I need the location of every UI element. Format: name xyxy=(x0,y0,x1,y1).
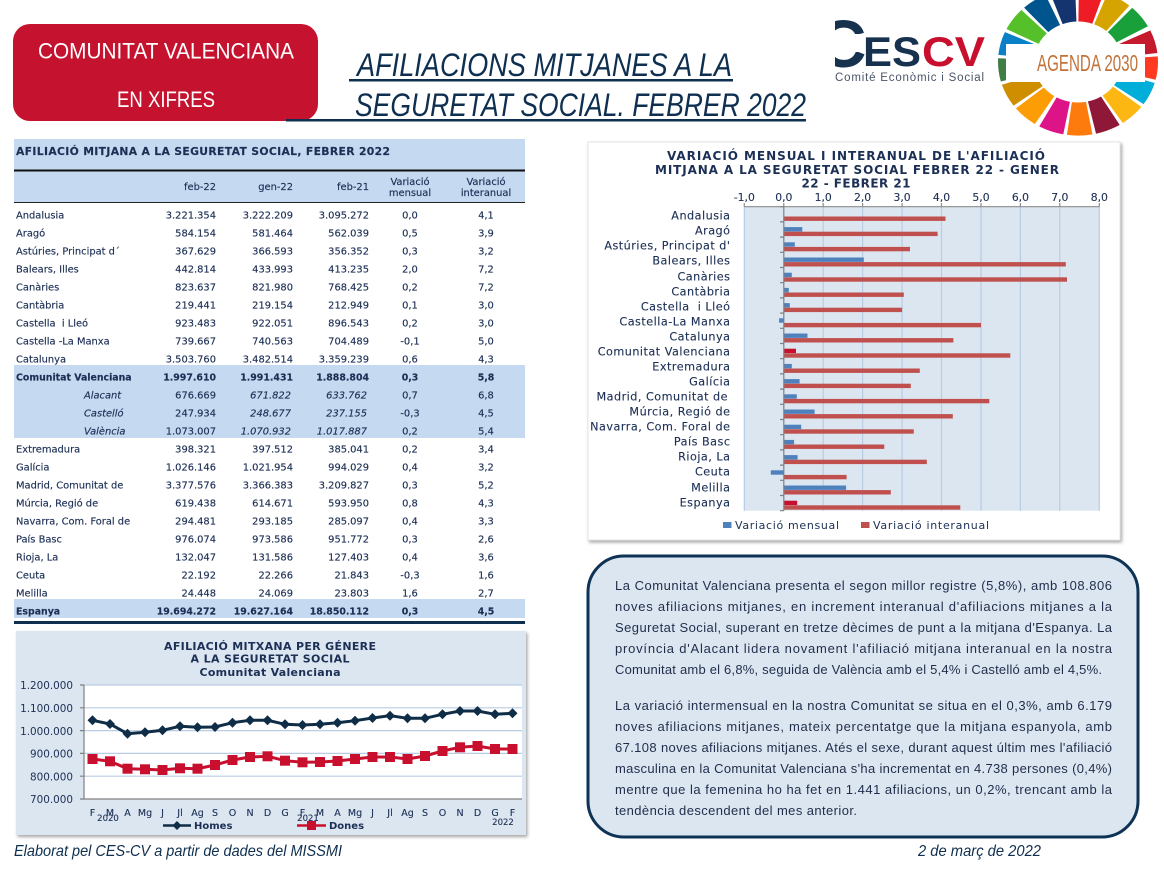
row: Andalusia: 3.095.272 xyxy=(319,210,369,222)
source note: Elaborat pel CES-CV a partir de dades del MISSMI xyxy=(14,843,342,860)
paragraph one: noves afiliacions mitjanes, en increment interanual d'afiliacions mitjanes a la xyxy=(615,599,1113,614)
series: Homes xyxy=(92,711,512,734)
row: Alacant: 633.762 xyxy=(326,390,367,402)
row: Astúries xyxy=(16,246,494,258)
row: Andalusia: Andalusia xyxy=(16,210,64,222)
row: Navarra: 0,4 xyxy=(402,516,418,528)
row: Galícia: 1.026.146 xyxy=(166,462,216,474)
row: Navarra: 294.481 xyxy=(175,516,216,528)
category labels: Castella-La Manxa xyxy=(619,316,730,328)
category labels: Catalunya xyxy=(669,330,730,344)
x axis month labels: S xyxy=(212,808,218,819)
row: Alacant: 0,7 xyxy=(402,390,418,402)
row: Cantàbria: 212.949 xyxy=(328,300,369,312)
yearly variation bars xyxy=(784,216,1067,510)
row: Extremadura: 397.512 xyxy=(252,444,293,456)
row: Madrid: 3.377.576 xyxy=(166,480,216,492)
row: Galícia: 1.021.954 xyxy=(243,462,293,474)
top axis labels: 2,0 xyxy=(854,191,871,204)
row: Ceuta: 22.266 xyxy=(258,570,293,582)
row: Castelló: 4,5 xyxy=(478,408,494,420)
x axis month labels: M xyxy=(106,808,114,819)
category labels: Espanya xyxy=(680,496,730,510)
highlight band: Espanya xyxy=(14,599,525,618)
x axis month labels: D xyxy=(474,808,481,819)
row: Extremadura: 398.321 xyxy=(175,444,216,456)
row: Andalusia: 0,0 xyxy=(402,210,418,222)
x axis month labels: Jl xyxy=(386,808,393,819)
row: Canàries: Canàries xyxy=(16,282,59,294)
line chart title: AFILIACIÓ MITXANA PER GÉNERE xyxy=(164,640,376,653)
commentary panel xyxy=(588,556,1138,837)
top axis labels: -1,0 xyxy=(734,191,755,204)
row: Múrcia: 593.950 xyxy=(328,498,369,510)
row: País Basc: País Basc xyxy=(16,534,62,546)
monthly variation bars xyxy=(771,227,864,505)
category labels: Canàries xyxy=(677,270,730,284)
bar chart legend: Variació interanual xyxy=(873,519,989,532)
row: València: València xyxy=(84,426,125,438)
row: Navarra: Navarra, Com. Foral de xyxy=(16,516,130,528)
logo: Agenda 2030 wheel xyxy=(990,0,1164,143)
paragraph two: La variació intermensual en la nostra Comunitat se situa en el 0,3%, amb 6.179 xyxy=(615,698,1112,713)
series: Dones xyxy=(92,746,512,770)
paragraph two: 67.108 noves afiliacions mitjanes. Atés el sexe, durant aquest últim mes l'afiliació xyxy=(615,740,1112,755)
row: Melilla: 2,7 xyxy=(478,588,494,600)
red header badge: COMUNITAT VALENCIANA xyxy=(38,38,294,64)
row: Canàries: 821.980 xyxy=(252,282,293,294)
row: Ceuta: 22.192 xyxy=(181,570,216,582)
row: Canàries xyxy=(16,282,494,294)
row: Comunitat Valenciana: 5,8 xyxy=(478,372,494,384)
row: Canàries: 823.637 xyxy=(175,282,216,294)
category labels: Castella i Lleó xyxy=(641,300,730,314)
row: Melilla: 23.803 xyxy=(334,588,369,600)
top axis labels: 6,0 xyxy=(1012,191,1029,204)
row: Extremadura: 0,2 xyxy=(402,444,418,456)
x axis month labels: M xyxy=(316,808,324,819)
row: Ceuta: -0,3 xyxy=(400,570,420,582)
row: Múrcia: 4,3 xyxy=(478,498,494,510)
row: Comunitat Valenciana: 1.997.610 xyxy=(163,372,216,384)
row: Melilla xyxy=(16,588,494,600)
row: Rioja: 131.586 xyxy=(252,552,293,564)
x axis month labels: F xyxy=(300,808,305,819)
row: Espanya: 19.627.164 xyxy=(234,606,293,618)
x axis month labels: J xyxy=(160,808,164,819)
paragraph two: mentre que la femenina ho ha fet en 1.441 afiliacions, un 0,2%, trencant amb la xyxy=(615,782,1113,797)
row: Balears xyxy=(16,264,494,276)
table column headers: feb-21 xyxy=(337,182,369,193)
row: Múrcia: Múrcia, Regió de xyxy=(16,498,98,510)
row: Castella-La Manxa xyxy=(16,336,494,348)
row: Canàries: 7,2 xyxy=(478,282,494,294)
row: València: 5,4 xyxy=(478,426,494,438)
bar chart title: VARIACIÓ MENSUAL I INTERANUAL DE L'AFILIACIÓ xyxy=(667,148,1045,163)
row: Aragó: 0,5 xyxy=(402,228,418,240)
row: Catalunya: 3.482.514 xyxy=(243,354,293,366)
x axis month labels: Ag xyxy=(191,808,204,819)
row: Múrcia: 619.438 xyxy=(175,498,216,510)
row: Madrid: 0,3 xyxy=(402,480,418,492)
x axis month labels xyxy=(90,808,515,828)
top axis labels: 4,0 xyxy=(933,191,950,204)
table column headers: feb-22 xyxy=(184,182,216,193)
row: Alacant xyxy=(83,390,494,402)
main title xyxy=(286,47,806,123)
row: Castelló: -0,3 xyxy=(400,408,420,420)
row: Balears: 442.814 xyxy=(175,264,216,276)
paragraph one: Comunitat amb el 6,8%, seguida de València amb el 5,4% i Castelló amb el 4,5%. xyxy=(615,662,1102,677)
line chart: affiliation by gender xyxy=(16,631,526,835)
x axis month labels: 2020 xyxy=(97,814,119,824)
line chart title: Comunitat Valenciana xyxy=(200,666,340,679)
category labels: Extremadura xyxy=(652,360,730,374)
row: Cantàbria: 0,1 xyxy=(402,300,418,312)
row: Astúries: 367.629 xyxy=(175,246,216,258)
category labels: Navarra, Com. Foral de xyxy=(590,420,730,434)
row: Rioja: Rioja, La xyxy=(16,552,58,564)
row: Galícia: 0,4 xyxy=(402,462,418,474)
row: Madrid: 3.209.827 xyxy=(319,480,369,492)
x axis month labels: 2022 xyxy=(492,818,514,828)
logo: CES-CV: CV xyxy=(922,28,985,75)
data table xyxy=(14,139,525,624)
paragraph one xyxy=(615,578,1113,677)
row: Catalunya xyxy=(16,354,494,366)
row: Aragó: Aragó xyxy=(16,228,45,240)
row: Aragó: 581.464 xyxy=(252,228,293,240)
row: València: 0,2 xyxy=(402,426,418,438)
row: Espanya xyxy=(16,606,494,618)
row: Catalunya: 3.359.239 xyxy=(319,354,369,366)
row: Castelló: 247.934 xyxy=(175,408,216,420)
row: Espanya: Espanya xyxy=(16,606,60,618)
x axis month labels: Mg xyxy=(138,808,152,819)
x axis month labels: G xyxy=(491,808,499,819)
row: Rioja: 0,4 xyxy=(402,552,418,564)
row: Comunitat Valenciana: Comunitat Valenciana xyxy=(16,372,132,384)
paragraph two: noves afiliacions mitjanes, mateix percentatge que la mitjana espanyola, amb xyxy=(615,719,1112,734)
x axis month labels: A xyxy=(334,808,341,819)
y axis labels: 1.200.000 xyxy=(20,680,73,692)
row: Navarra: 293.185 xyxy=(252,516,293,528)
row: Espanya: 4,5 xyxy=(478,606,494,618)
row: Alacant: 671.822 xyxy=(250,390,291,402)
category labels: Melilla xyxy=(691,482,730,494)
row: València: 1.073.007 xyxy=(166,426,216,438)
y axis labels: 1.100.000 xyxy=(20,703,73,715)
y axis labels xyxy=(20,680,73,806)
row: Catalunya: 4,3 xyxy=(478,354,494,366)
logo: CES-CV xyxy=(835,20,985,81)
bar chart legend xyxy=(723,519,989,532)
row: Castella i Lleó: 896.543 xyxy=(328,318,369,330)
paragraph one: La Comunitat Valenciana presenta el segon millor registre (5,8%), amb 108.806 xyxy=(615,578,1112,593)
row: Castelló: Castelló xyxy=(84,408,124,420)
row: Rioja: 132.047 xyxy=(175,552,216,564)
line chart legend xyxy=(163,821,364,832)
row: Astúries: 0,3 xyxy=(402,246,418,258)
row: Extremadura: Extremadura xyxy=(16,444,80,456)
row: Canàries: 768.425 xyxy=(328,282,369,294)
row: Canàries: 0,2 xyxy=(402,282,418,294)
row: País Basc: 976.074 xyxy=(175,534,216,546)
x axis month labels: 2021 xyxy=(297,814,319,824)
row: Castella i Lleó: Castella i Lleó xyxy=(16,318,88,330)
line chart legend: Dones xyxy=(329,821,364,832)
publication date: 2 de març de 2022 xyxy=(917,843,1041,860)
row: Castella-La Manxa: 740.563 xyxy=(252,336,293,348)
row: Cantàbria: 3,0 xyxy=(478,300,494,312)
row: València: 1.070.932 xyxy=(241,426,291,438)
y axis labels: 700.000 xyxy=(30,794,73,806)
row: Andalusia xyxy=(16,210,494,222)
x axis month labels: O xyxy=(439,808,446,819)
category labels xyxy=(590,210,730,510)
row: Comunitat Valenciana xyxy=(16,372,494,384)
bar chart title: MITJANA A LA SEGURETAT SOCIAL FEBRER 22 - GENER xyxy=(655,163,1059,177)
top axis labels: 7,0 xyxy=(1051,191,1069,204)
row: País Basc: 951.772 xyxy=(328,534,369,546)
table column headers xyxy=(14,170,525,203)
row: Rioja: 3,6 xyxy=(478,552,494,564)
category labels: Astúries, Principat d' xyxy=(604,240,730,252)
x axis month labels: S xyxy=(422,808,428,819)
row: Aragó: 584.154 xyxy=(175,228,216,240)
x axis month labels: N xyxy=(246,808,254,819)
table column headers: gen-22 xyxy=(258,182,293,193)
row: Alacant: 676.669 xyxy=(175,390,216,402)
row: País Basc xyxy=(16,534,494,546)
highlight band: Comunitat Valenciana xyxy=(14,365,525,438)
row: Galícia: 3,2 xyxy=(478,462,494,474)
main title: SEGURETAT SOCIAL. FEBRER 2022 xyxy=(355,87,806,123)
category labels: Rioja, La xyxy=(678,450,730,464)
category labels: Comunitat Valenciana xyxy=(598,346,730,358)
paragraph one: província d'Alacant lidera novament l'afiliació mitjana interanual en la nostra xyxy=(615,641,1113,656)
x axis month labels: F xyxy=(90,808,95,819)
row: Ceuta: 21.843 xyxy=(334,570,369,582)
row: Castelló: 237.155 xyxy=(326,408,367,420)
row: Castella-La Manxa: Castella -La Manxa xyxy=(16,336,110,348)
x axis month labels: Ag xyxy=(401,808,414,819)
row: Castelló: 248.677 xyxy=(250,408,292,420)
row: Aragó: 562.039 xyxy=(328,228,369,240)
row: Madrid xyxy=(16,480,494,492)
row: Extremadura xyxy=(16,444,494,456)
row: Andalusia: 3.221.354 xyxy=(166,210,216,222)
line chart title xyxy=(164,640,376,679)
red header badge: EN XIFRES xyxy=(117,87,215,112)
row: Espanya: 18.850.112 xyxy=(310,606,369,618)
row: Melilla: 1,6 xyxy=(402,588,418,600)
row: Aragó xyxy=(16,228,494,240)
logo: CES-CV: Comité Econòmic i Social xyxy=(835,72,984,84)
row: Galícia xyxy=(16,462,494,474)
x axis month labels: A xyxy=(124,808,131,819)
row: Astúries: Astúries, Principat d´ xyxy=(16,246,120,258)
category labels: País Basc xyxy=(674,436,730,448)
category labels: Galícia xyxy=(689,376,730,388)
row: Galícia: Galícia xyxy=(16,462,49,474)
row: Extremadura: 3,4 xyxy=(478,444,494,456)
row: Castelló xyxy=(84,408,494,420)
x axis month labels: D xyxy=(264,808,271,819)
row: Castella i Lleó: 3,0 xyxy=(478,318,494,330)
row: Madrid: Madrid, Comunitat de xyxy=(16,480,123,492)
row: Navarra: 285.097 xyxy=(328,516,369,528)
x axis month labels: G xyxy=(281,808,289,819)
table column headers: Variació xyxy=(466,176,506,188)
x axis month labels: Mg xyxy=(348,808,362,819)
row: Castella i Lleó: 0,2 xyxy=(402,318,418,330)
bar chart title: 22 - FEBRER 21 xyxy=(802,176,910,190)
row: Rioja: 127.403 xyxy=(328,552,369,564)
row: Castella-La Manxa: 704.489 xyxy=(328,336,369,348)
row: Navarra xyxy=(16,516,494,528)
line chart title: A LA SEGURETAT SOCIAL xyxy=(190,652,350,666)
row: Melilla: 24.448 xyxy=(181,588,216,600)
category labels: Madrid, Comunitat de xyxy=(596,390,728,404)
y axis labels: 800.000 xyxy=(30,772,73,784)
row: Ceuta: 1,6 xyxy=(478,570,494,582)
table column headers: interanual xyxy=(461,188,511,199)
row: Ceuta xyxy=(16,570,494,582)
y axis labels: 900.000 xyxy=(30,748,73,760)
row: Navarra: 3,3 xyxy=(478,516,494,528)
row: Cantàbria: 219.154 xyxy=(252,300,293,312)
row: Cantàbria: 219.441 xyxy=(175,300,216,312)
bar chart legend: Variació mensual xyxy=(735,519,839,532)
row: València xyxy=(84,426,494,438)
row: País Basc: 973.586 xyxy=(252,534,293,546)
row: Castella i Lleó: 922.051 xyxy=(252,318,293,330)
paragraph two: masculina en la Comunitat Valenciana s'ha incrementat en 4.738 persones (0,4%) xyxy=(615,761,1112,776)
top axis labels: 3,0 xyxy=(894,191,911,204)
row: Alacant: Alacant xyxy=(83,390,122,402)
y axis labels: 1.000.000 xyxy=(20,726,73,738)
row: Múrcia: 614.671 xyxy=(252,498,293,510)
row: Catalunya: 0,6 xyxy=(402,354,418,366)
row: Ceuta: Ceuta xyxy=(16,570,45,582)
row: Múrcia: 0,8 xyxy=(402,498,418,510)
row: Galícia: 994.029 xyxy=(328,462,369,474)
category labels: Cantàbria xyxy=(671,286,730,298)
row: Astúries: 356.352 xyxy=(328,246,369,258)
row: Astúries: 366.593 xyxy=(252,246,293,258)
table title band xyxy=(14,139,525,170)
row: Espanya: 0,3 xyxy=(402,606,418,618)
row: Melilla: 24.069 xyxy=(258,588,293,600)
row: Astúries: 3,2 xyxy=(478,246,494,258)
row: València: 1.017.887 xyxy=(317,426,368,438)
category labels: Múrcia, Regió de xyxy=(629,406,730,418)
logo: CES-CV: ES xyxy=(863,28,921,75)
paragraph one: Seguretat Social, superant en tretze dècimes de punt a la mitjana d'Espanya. La xyxy=(615,620,1113,635)
bar chart: monthly and yearly variation xyxy=(588,142,1120,540)
row: Comunitat Valenciana: 0,3 xyxy=(402,372,418,384)
top axis labels xyxy=(734,191,1108,204)
x axis month labels: O xyxy=(229,808,236,819)
x axis month labels: N xyxy=(456,808,464,819)
x axis month labels: Jl xyxy=(176,808,183,819)
x axis month labels: F xyxy=(510,808,515,819)
row: Madrid: 5,2 xyxy=(478,480,494,492)
row: Balears: 413.235 xyxy=(328,264,369,276)
row: Andalusia: 4,1 xyxy=(478,210,494,222)
row: Alacant: 6,8 xyxy=(478,390,494,402)
red header badge xyxy=(13,24,318,121)
category labels: Balears, Illes xyxy=(652,254,730,268)
row: Balears: Balears, Illes xyxy=(16,264,79,276)
row: Comunitat Valenciana: 1.888.804 xyxy=(316,372,369,384)
line chart legend: Homes xyxy=(194,821,232,832)
row: Espanya: 19.694.272 xyxy=(157,606,216,618)
row: Andalusia: 3.222.209 xyxy=(243,210,293,222)
category labels: Aragó xyxy=(695,224,730,238)
row: País Basc: 2,6 xyxy=(478,534,494,546)
row: Castella i Lleó: 923.483 xyxy=(175,318,216,330)
x axis month labels: J xyxy=(370,808,374,819)
main title: AFILIACIONS MITJANES A LA xyxy=(355,47,732,83)
table bottom rule xyxy=(14,621,525,624)
row: Comunitat Valenciana: 1.991.431 xyxy=(240,372,293,384)
row: Cantàbria xyxy=(16,300,494,312)
paragraph two xyxy=(615,698,1113,818)
paragraph two: tendència descendent del mes anterior. xyxy=(615,803,857,818)
row: Balears: 7,2 xyxy=(478,264,494,276)
row: Extremadura: 385.041 xyxy=(328,444,369,456)
row: Balears: 2,0 xyxy=(402,264,418,276)
row: Catalunya: 3.503.760 xyxy=(166,354,216,366)
row: País Basc: 0,3 xyxy=(402,534,418,546)
row: Múrcia xyxy=(16,498,494,510)
category labels: Andalusia xyxy=(671,210,730,222)
row: Balears: 433.993 xyxy=(252,264,293,276)
row: Castella-La Manxa: -0,1 xyxy=(400,336,420,348)
row: Rioja xyxy=(16,552,494,564)
top axis labels: 1,0 xyxy=(815,191,832,204)
row: Cantàbria: Cantàbria xyxy=(16,300,64,312)
bar chart title xyxy=(655,148,1059,190)
table title band: AFILIACIÓ MITJANA A LA SEGURETAT SOCIAL, FEBRER 2022 xyxy=(16,145,390,158)
table column headers: Variació xyxy=(390,176,430,188)
category labels: Ceuta xyxy=(695,466,730,478)
table column headers: mensual xyxy=(389,188,431,199)
row: Melilla: Melilla xyxy=(16,588,48,600)
logo: CES-CV: C xyxy=(818,7,866,82)
top axis labels: 5,0 xyxy=(972,191,990,204)
row: Castella-La Manxa: 739.667 xyxy=(175,336,216,348)
row: Castella i Lleó xyxy=(16,318,494,330)
row: Catalunya: Catalunya xyxy=(16,354,66,366)
row: Castella-La Manxa: 5,0 xyxy=(478,336,494,348)
top axis labels: 8,0 xyxy=(1091,191,1108,204)
row: Aragó: 3,9 xyxy=(478,228,494,240)
row: Madrid: 3.366.383 xyxy=(243,480,293,492)
top axis labels: 0,0 xyxy=(775,191,793,204)
